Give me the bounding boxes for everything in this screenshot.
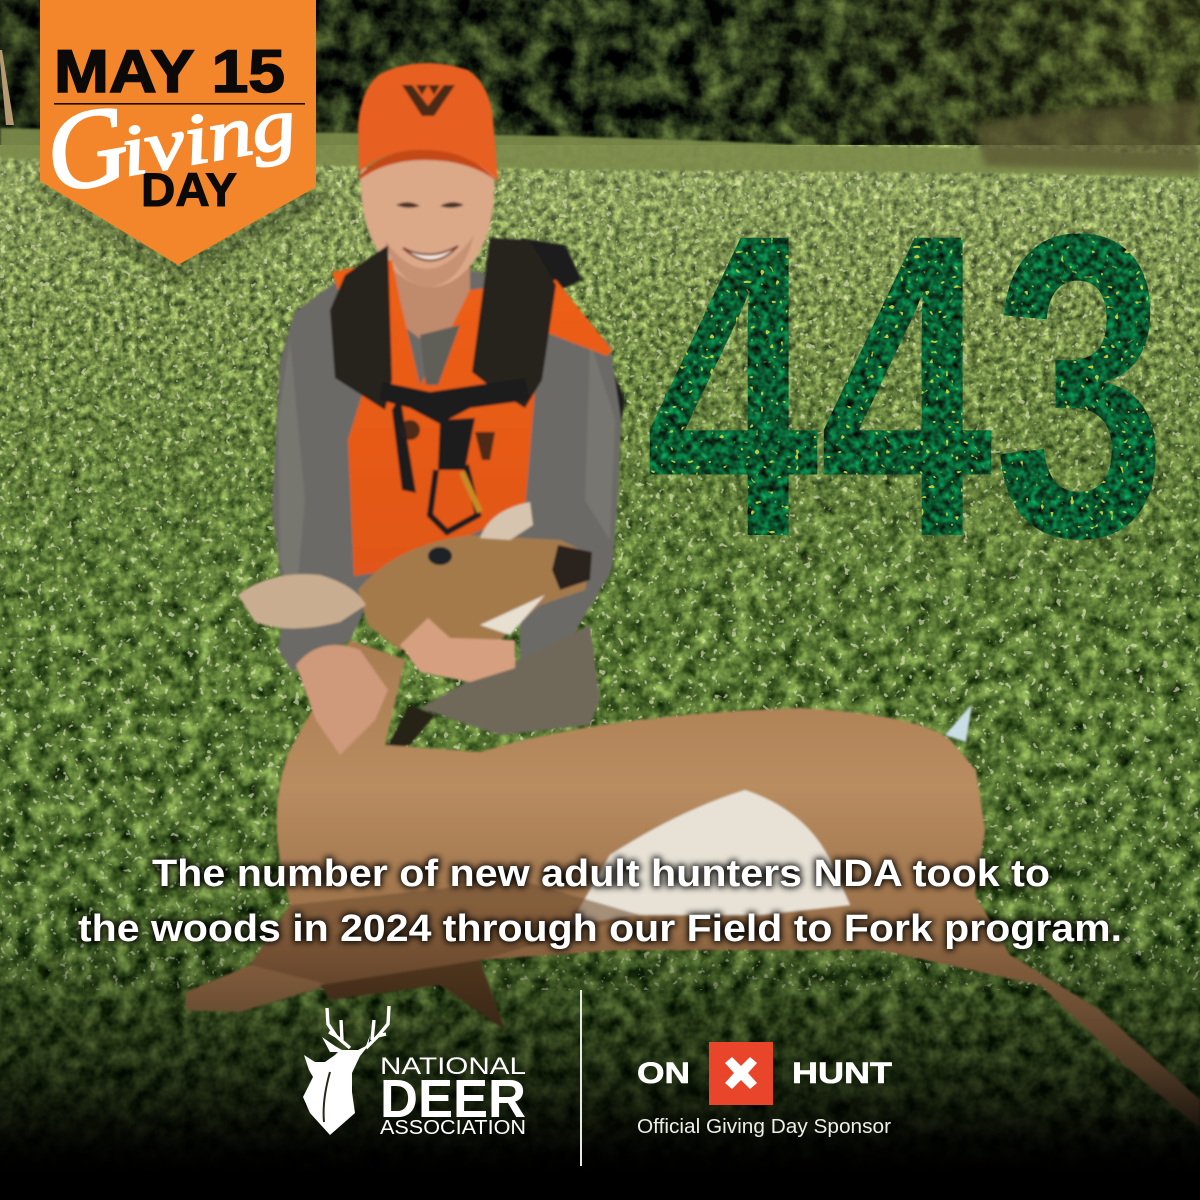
hunter neck and face	[390, 250, 470, 350]
orange cap	[358, 63, 498, 181]
deer mark	[303, 1006, 389, 1135]
NDA logo	[303, 1006, 526, 1139]
deer belly	[570, 790, 850, 925]
backpack straps	[330, 245, 392, 410]
hunter shirt	[272, 270, 621, 672]
date banner	[36, 0, 316, 265]
deer head	[358, 535, 592, 650]
deer underside shade	[250, 880, 640, 985]
deer hind leg	[320, 960, 505, 1030]
vest logos	[400, 420, 420, 440]
x mark	[709, 1042, 773, 1105]
cap logo	[402, 85, 455, 116]
hunter hands	[296, 645, 388, 755]
caption shadow: the woods in 2024 through our Field to Fork program.	[78, 908, 1122, 950]
caption text	[78, 853, 1122, 950]
giving script	[36, 52, 304, 217]
pants	[420, 625, 600, 735]
deer body	[186, 640, 1200, 1128]
carabiner	[430, 465, 478, 532]
giving script: G	[36, 81, 137, 217]
onX Hunt logo	[637, 1042, 892, 1138]
hunter backpack	[520, 238, 625, 445]
doe separator	[324, 1072, 330, 1122]
sponsor text: Official Giving Day Sponsor	[637, 1116, 891, 1138]
buck, doe silhouette	[303, 1035, 370, 1135]
date text: MAY 15	[54, 38, 285, 105]
day text: DAY	[141, 163, 237, 216]
divider	[54, 103, 305, 105]
on word: ON	[637, 1057, 690, 1090]
deer tail	[945, 704, 972, 742]
banner shadow	[40, 182, 330, 280]
caption text: The number of new adult hunters NDA took to	[152, 853, 1050, 895]
caption shadow: The number of new adult hunters NDA took to	[152, 853, 1050, 895]
orange vest	[332, 260, 612, 576]
face	[361, 158, 494, 287]
giving script: iving	[114, 82, 302, 192]
logo wordmark national: NATIONAL	[380, 1053, 526, 1080]
logo wordmark deer: DEER	[380, 1069, 526, 1129]
gray chest gap	[420, 325, 460, 385]
hunt word: HUNT	[792, 1057, 892, 1090]
photo subject: hunter with deer	[186, 63, 1200, 1128]
logo wordmark association: ASSOCIATION	[380, 1117, 526, 1139]
bottom dark fade	[0, 930, 1200, 1200]
antlers	[327, 1006, 389, 1048]
caption text: the woods in 2024 through our Field to Fork program.	[78, 908, 1122, 950]
deer ears	[238, 574, 366, 628]
logo divider	[580, 990, 582, 1166]
caption shadow	[78, 853, 1122, 950]
